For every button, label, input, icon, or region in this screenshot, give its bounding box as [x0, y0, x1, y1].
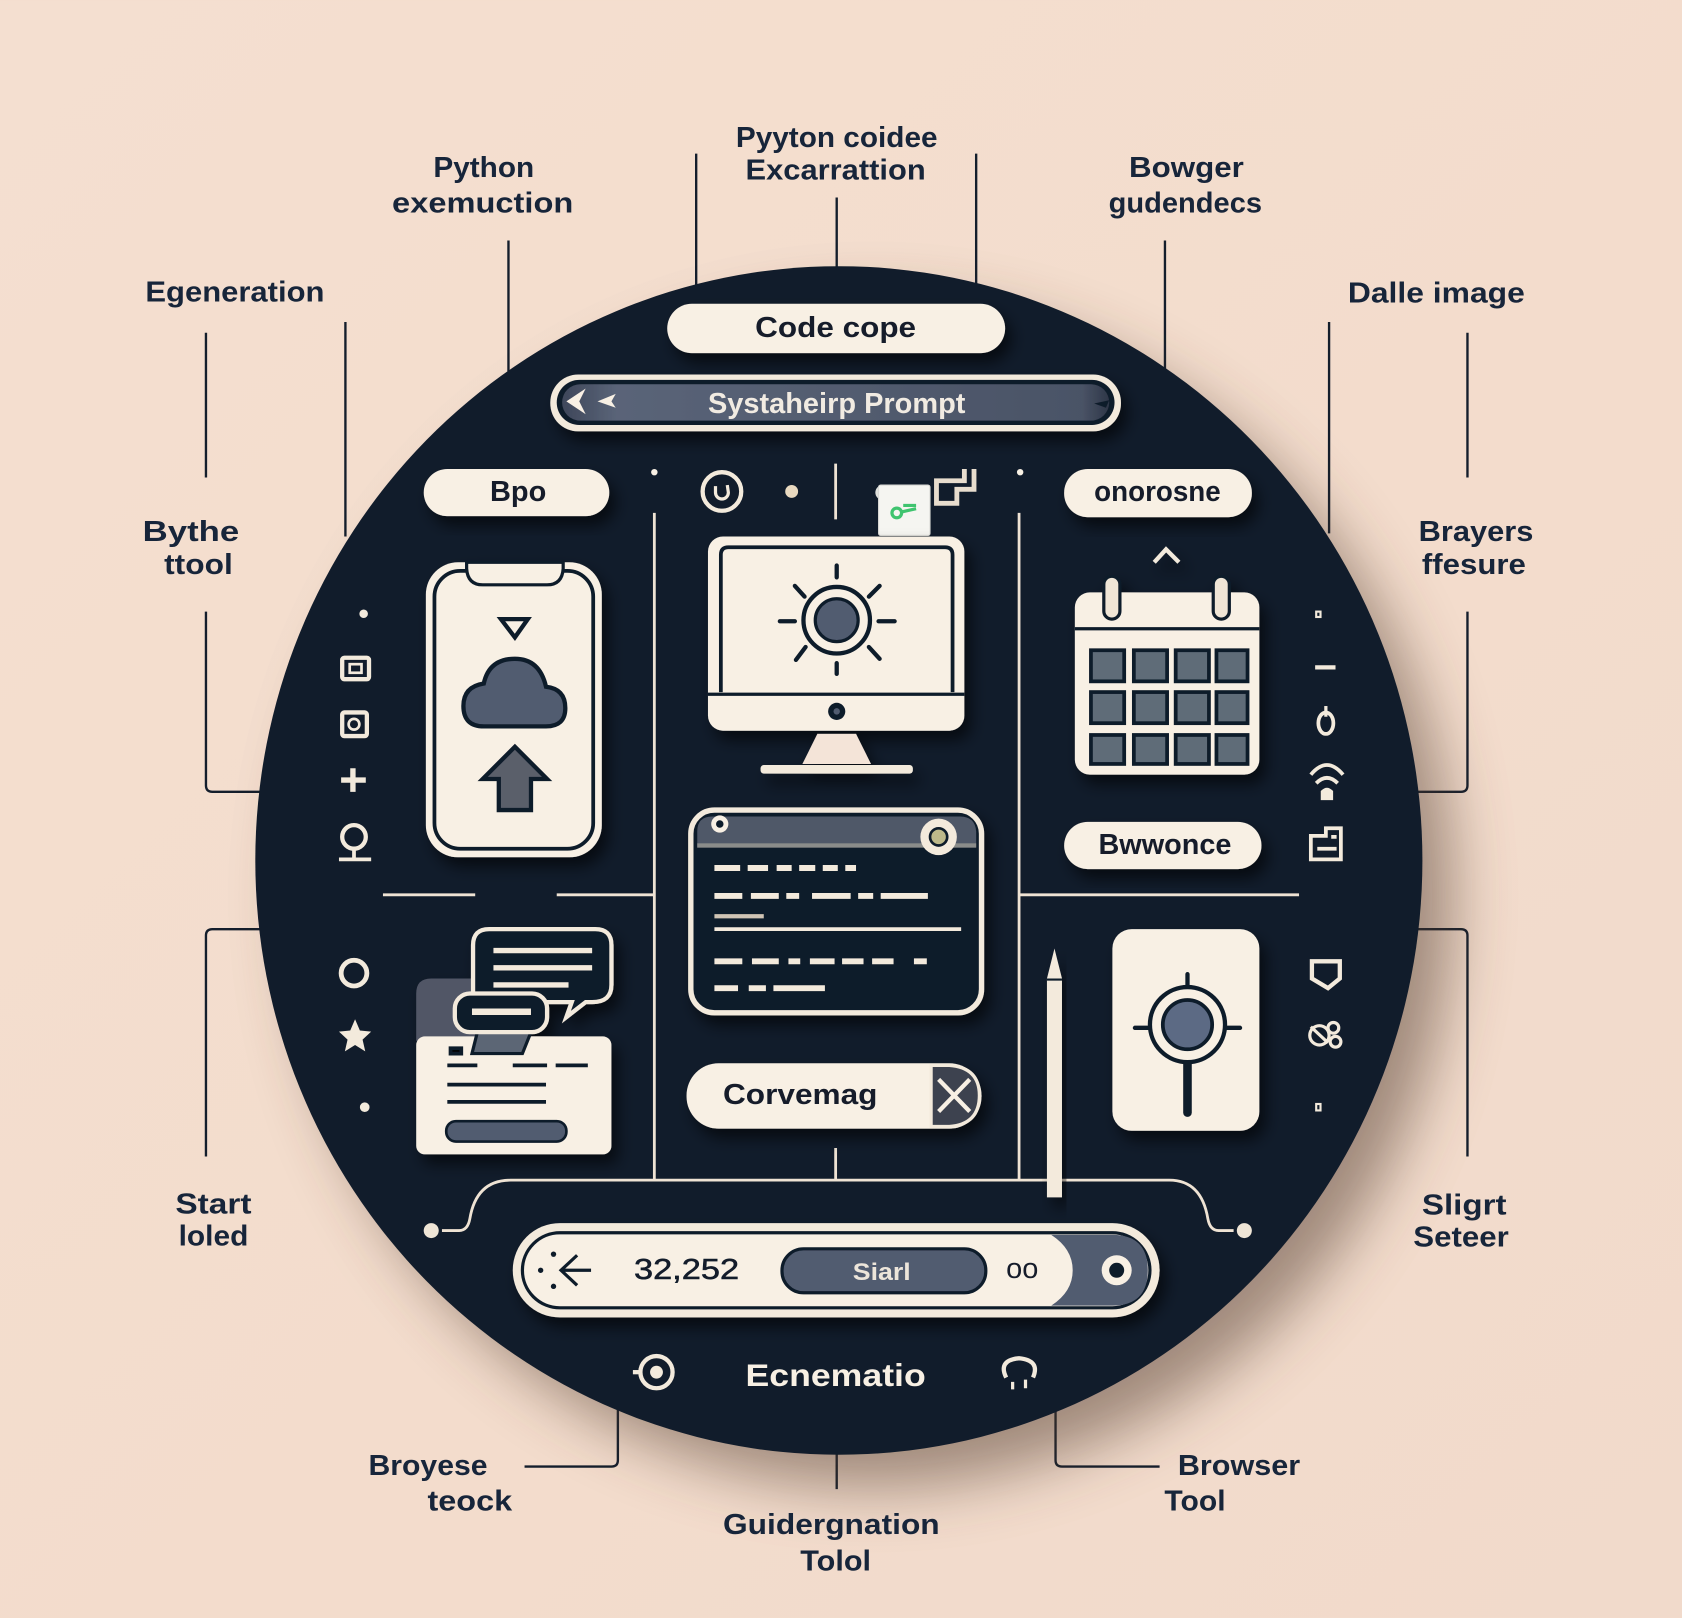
icon: pen — [1047, 948, 1062, 1197]
monitor button — [828, 703, 845, 720]
icon: cloud — [463, 659, 565, 726]
label: seteer: Seteer — [1413, 1222, 1509, 1254]
right side icons — [1310, 612, 1343, 1110]
icon: small dot — [785, 485, 798, 498]
label: egeneration: Egeneration — [145, 277, 324, 309]
panel: phone — [426, 562, 602, 857]
label: python execution: Python — [433, 152, 534, 184]
terminal header — [697, 817, 976, 848]
target handle — [1183, 1057, 1191, 1113]
top icon row — [651, 469, 1023, 511]
label: teock: teock — [427, 1486, 513, 1518]
panel: target card — [1112, 929, 1259, 1131]
document button — [446, 1121, 566, 1142]
label: excarrattion: Excarrattion — [746, 154, 926, 186]
label: guidergnation: Guidergnation — [723, 1509, 940, 1541]
icon: pipe glyph — [936, 469, 974, 503]
large speech bubble — [473, 929, 611, 1017]
icon: up arrow — [483, 747, 547, 810]
icon: bug — [1310, 1022, 1341, 1047]
pill: bpo — [424, 469, 609, 516]
panel: chat and document — [416, 929, 611, 1154]
icon: plus — [341, 768, 366, 792]
calendar cells — [1091, 650, 1248, 764]
bottom control bar — [513, 1223, 1160, 1317]
pill: bwwonce — [1064, 822, 1262, 869]
document body — [416, 1036, 611, 1154]
system prompt text: Systaheirp Prompt — [708, 388, 966, 420]
pill: onorosne — [1064, 469, 1252, 517]
main dark disc — [255, 266, 1422, 1455]
label: exemuction: exemuction — [392, 188, 573, 220]
pill: code cope — [667, 304, 1005, 353]
panel dividers — [383, 464, 1299, 1231]
icon: close x — [939, 1079, 970, 1112]
icon: signal triangle — [501, 619, 528, 637]
connector end dots — [424, 1223, 1252, 1238]
connector lines — [206, 154, 1467, 1489]
label: gudendecs: gudendecs — [1109, 188, 1262, 220]
label: tool: Tool — [1164, 1486, 1226, 1518]
monitor stand — [802, 734, 871, 764]
icon: refresh circle — [703, 472, 741, 511]
bar: system prompt — [550, 375, 1121, 431]
label: tolol: Tolol — [800, 1546, 871, 1578]
left side icons — [339, 612, 371, 1110]
panel: terminal window — [691, 810, 982, 1013]
code lines — [714, 868, 961, 988]
icon: location pin — [339, 825, 371, 859]
icon: back arrows — [566, 388, 616, 414]
label: dalle image: Dalle image — [1348, 278, 1525, 310]
bottom caption row — [633, 1356, 1035, 1393]
icon: sun — [780, 565, 895, 674]
oo mark: oo — [1006, 1253, 1038, 1285]
start button — [782, 1249, 986, 1293]
icon: stepped box — [1311, 828, 1341, 859]
label: brayers: Brayers — [1419, 516, 1533, 548]
pill: bwwonce: Bwwonce — [1098, 829, 1231, 861]
icon: ring — [341, 960, 367, 986]
icon: square two — [342, 712, 367, 736]
icon: star — [339, 1019, 371, 1051]
label: python code: Pyyton coidee — [736, 122, 938, 154]
small speech bubble — [472, 1032, 531, 1054]
label: sligrt: Sligrt — [1422, 1189, 1507, 1221]
label: browser: Browser — [1178, 1450, 1300, 1482]
panel: calendar — [1075, 549, 1259, 775]
pill: corvemag: Corvemag — [723, 1079, 877, 1111]
calendar rings — [1104, 576, 1120, 619]
icon: wifi — [1311, 765, 1343, 798]
panel: monitor — [708, 537, 964, 774]
label: bythe: Bythe — [143, 516, 239, 548]
bottom control bar: Siarl — [853, 1259, 911, 1285]
disc shadow — [294, 307, 1452, 1487]
label: broyese: Broyese — [368, 1450, 488, 1482]
label: loled: loled — [179, 1221, 248, 1253]
count: 32,252 — [634, 1254, 739, 1286]
icon: dash — [1315, 665, 1336, 669]
icon: back arrow — [538, 1251, 591, 1289]
phone notch — [467, 562, 563, 585]
label: ttool: ttool — [164, 549, 233, 581]
caption: Ecnematio — [746, 1358, 926, 1393]
label: ffesure: ffesure — [1422, 549, 1526, 581]
badge: green mark — [875, 485, 930, 535]
outer labels — [143, 122, 1533, 1578]
slate end cap — [1051, 1235, 1148, 1306]
icon: arc right — [1004, 1358, 1035, 1389]
label: browser guidance: Bowger — [1129, 152, 1244, 184]
caret — [1154, 549, 1179, 562]
label: start: Start — [175, 1188, 252, 1220]
icon: square one — [342, 658, 369, 679]
icon: bottle — [1318, 706, 1333, 734]
pill: onorosne: onorosne — [1094, 476, 1221, 508]
toggle dot — [1102, 1255, 1132, 1285]
icon: target left — [633, 1356, 673, 1388]
icon: shield bubble — [1312, 961, 1340, 988]
pill: code cope: Code cope — [755, 312, 916, 344]
pill: bpo: Bpo — [490, 476, 546, 508]
document tab — [416, 978, 504, 1041]
pill: corvemag — [687, 1063, 982, 1129]
